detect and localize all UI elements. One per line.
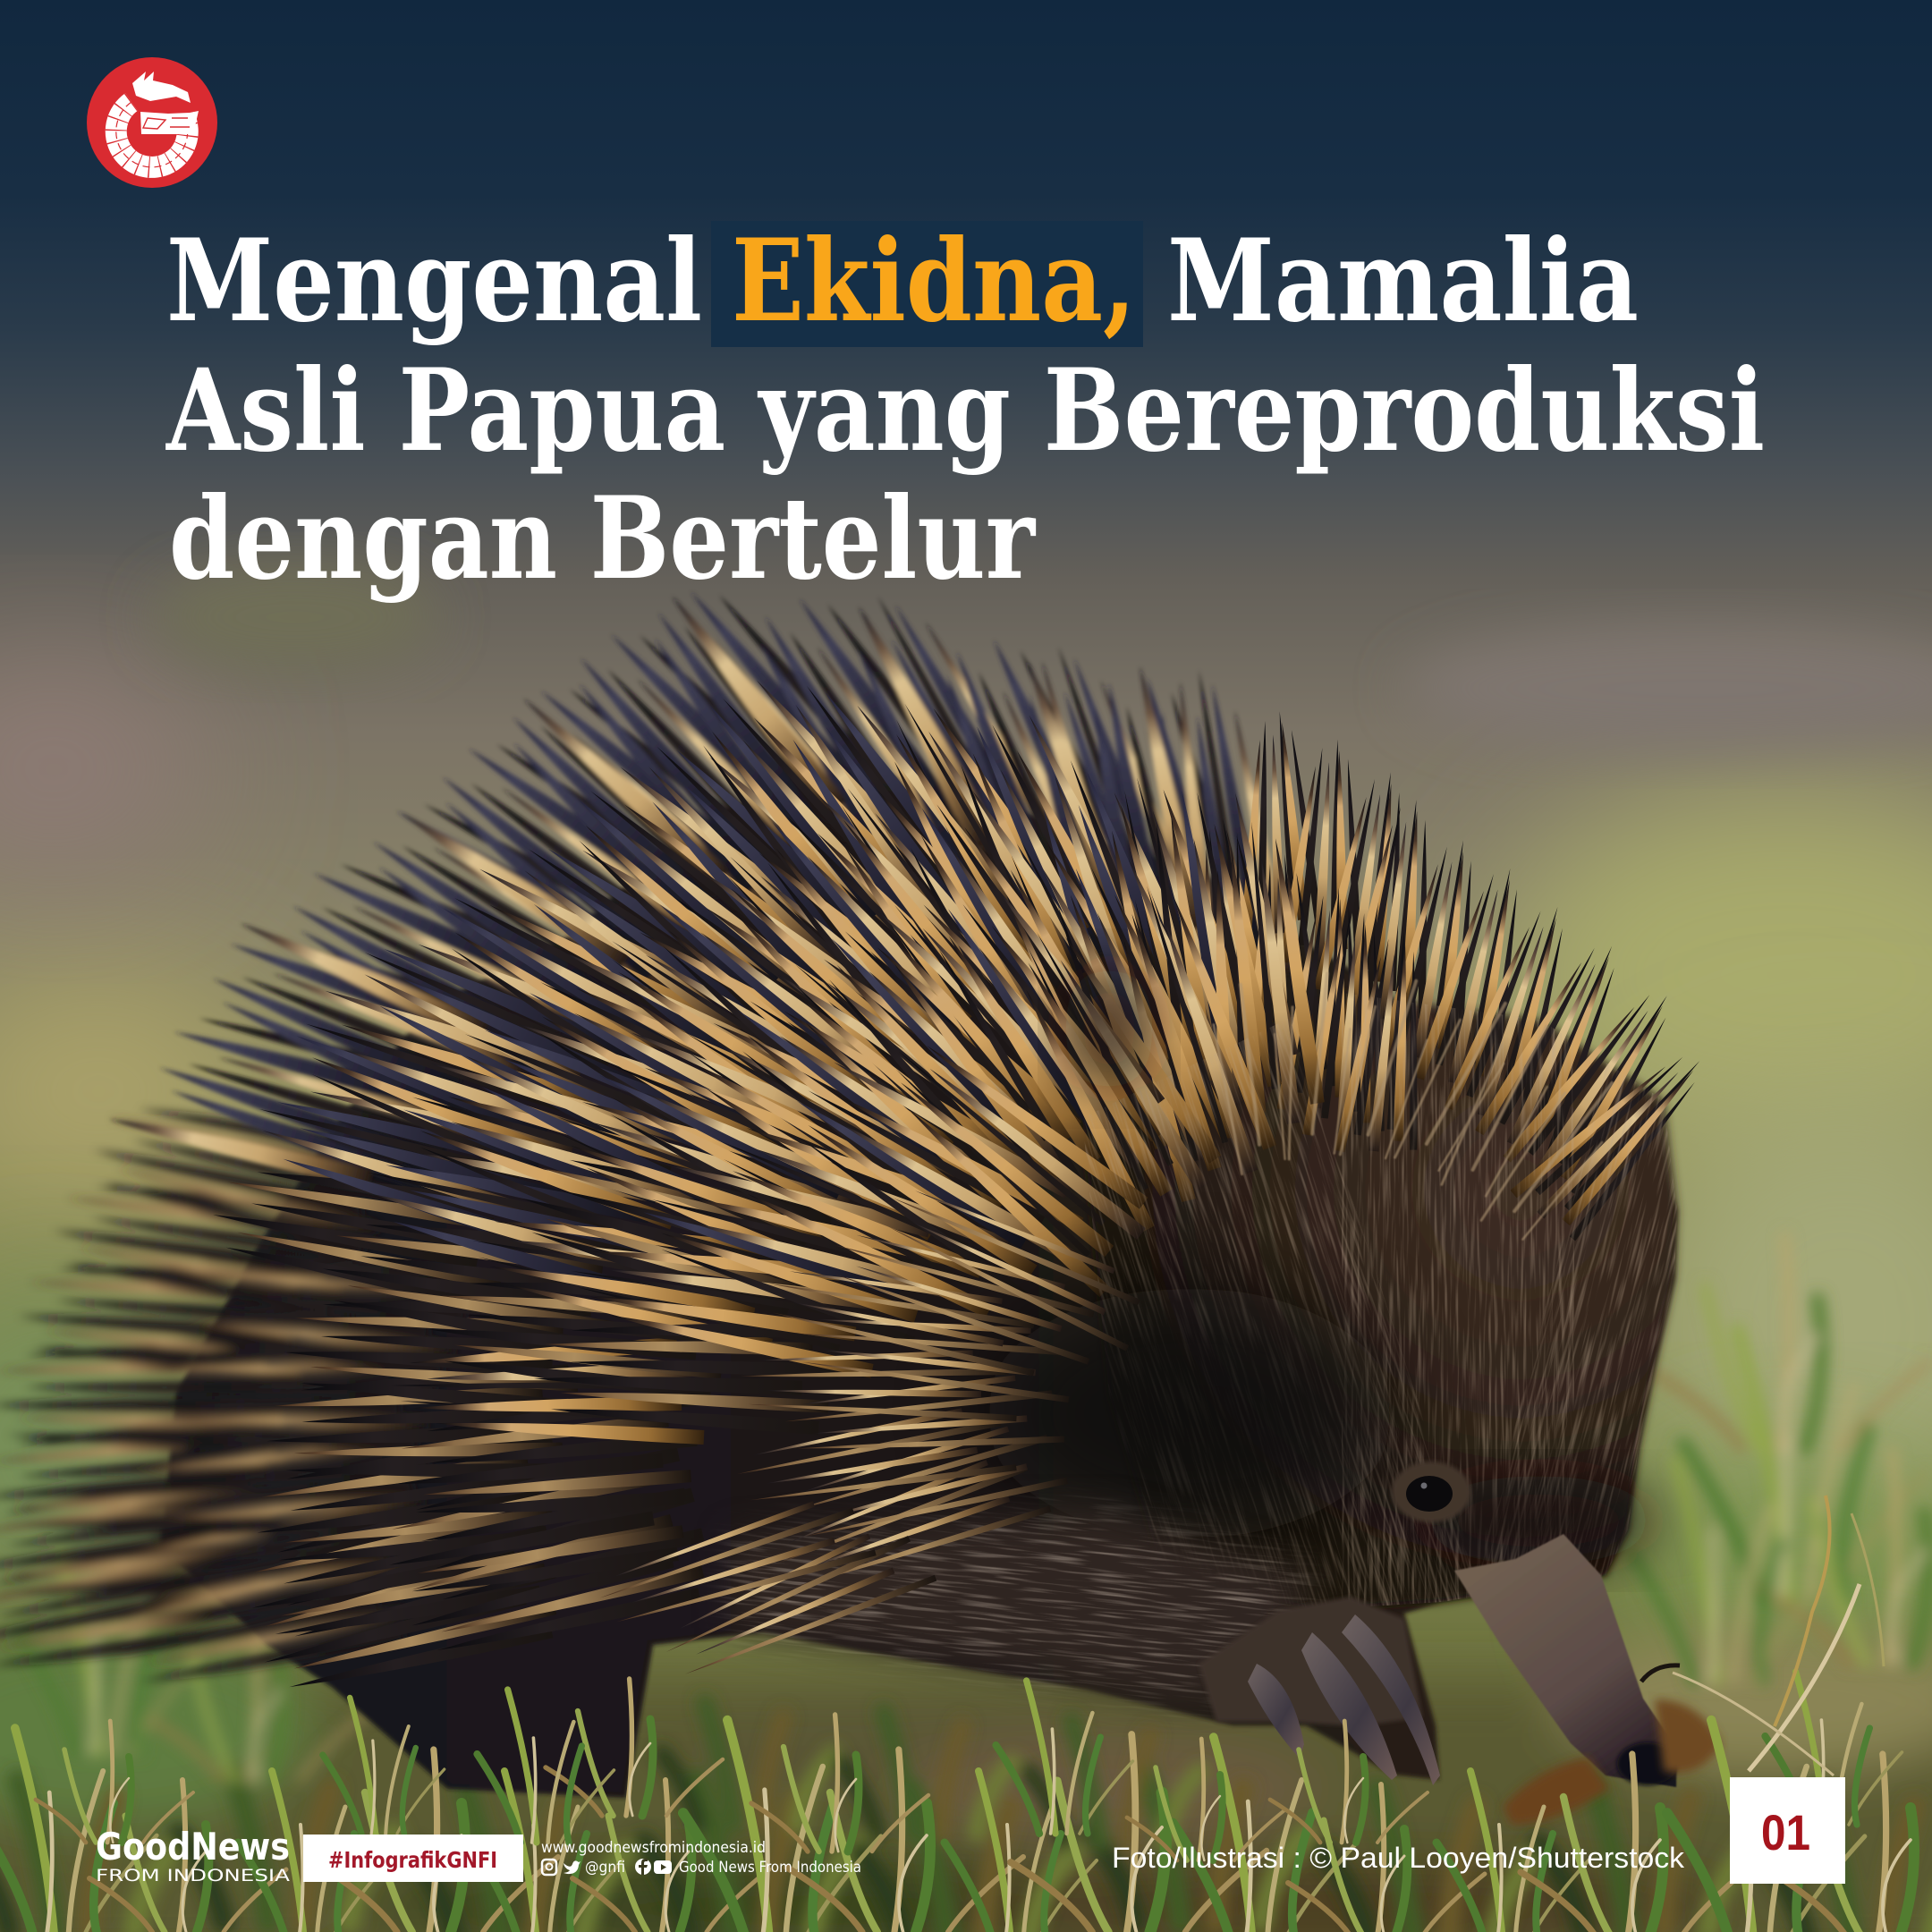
icon: instagram	[542, 1860, 556, 1875]
logo: red circle with eagle	[87, 57, 217, 188]
footer brand: GoodNews from Indonesia	[96, 1825, 290, 1885]
thin spines crossing the dark flank	[590, 1170, 1156, 1690]
title: Mengenal	[166, 215, 702, 347]
page number: 01	[1761, 1804, 1810, 1860]
dry leaf under the snout	[1503, 1665, 1722, 1825]
footer brand: GoodNews from Indonesia: GoodNews	[96, 1825, 290, 1868]
dark shadow around neck and face	[984, 966, 1655, 1565]
body silhouette	[161, 770, 1677, 1798]
title highlight box	[711, 221, 1143, 347]
title: dengan Bertelur	[169, 472, 1036, 605]
website and social handles: Good News From Indonesia	[679, 1859, 861, 1877]
foreground grass	[0, 1496, 1932, 1932]
title: Mamalia	[1167, 215, 1639, 347]
website and social handles: www.goodnewsfromindonesia.id	[541, 1839, 766, 1857]
website and social handles	[541, 1839, 861, 1877]
ground and blurred background grass	[0, 1236, 1932, 1932]
head and neck fur	[1082, 993, 1677, 1610]
icon: facebook	[635, 1859, 651, 1875]
front paw with claws	[1199, 1597, 1440, 1785]
footer brand: GoodNews from Indonesia: FROM INDONESIA	[96, 1866, 290, 1885]
website and social handles: @gnfi	[585, 1859, 625, 1877]
eye	[1392, 1462, 1470, 1522]
title: Ekidna,	[732, 215, 1136, 347]
hashtag label	[303, 1835, 523, 1882]
echidna	[0, 564, 1846, 1798]
right side spines	[1177, 710, 1725, 1248]
middle spines	[205, 657, 1327, 1707]
snout	[1454, 1534, 1678, 1787]
outer spines, out of focus	[106, 564, 1293, 1201]
head fur texture	[1084, 993, 1676, 1606]
far tail spines, strongly out of focus	[0, 1085, 470, 1701]
inner spines near the neck	[377, 869, 1235, 1671]
belly fur texture	[714, 1496, 1318, 1715]
page number	[1730, 1777, 1845, 1884]
icon: youtube	[654, 1860, 672, 1874]
photo credit: Foto/Ilustrasi : © Paul Looyen/Shutterstock	[1112, 1842, 1685, 1874]
title	[165, 215, 1765, 605]
thin pale quills over the head	[1208, 971, 1633, 1250]
icon: twitter	[564, 1860, 580, 1874]
hashtag label: #InfografikGNFI	[328, 1847, 497, 1873]
